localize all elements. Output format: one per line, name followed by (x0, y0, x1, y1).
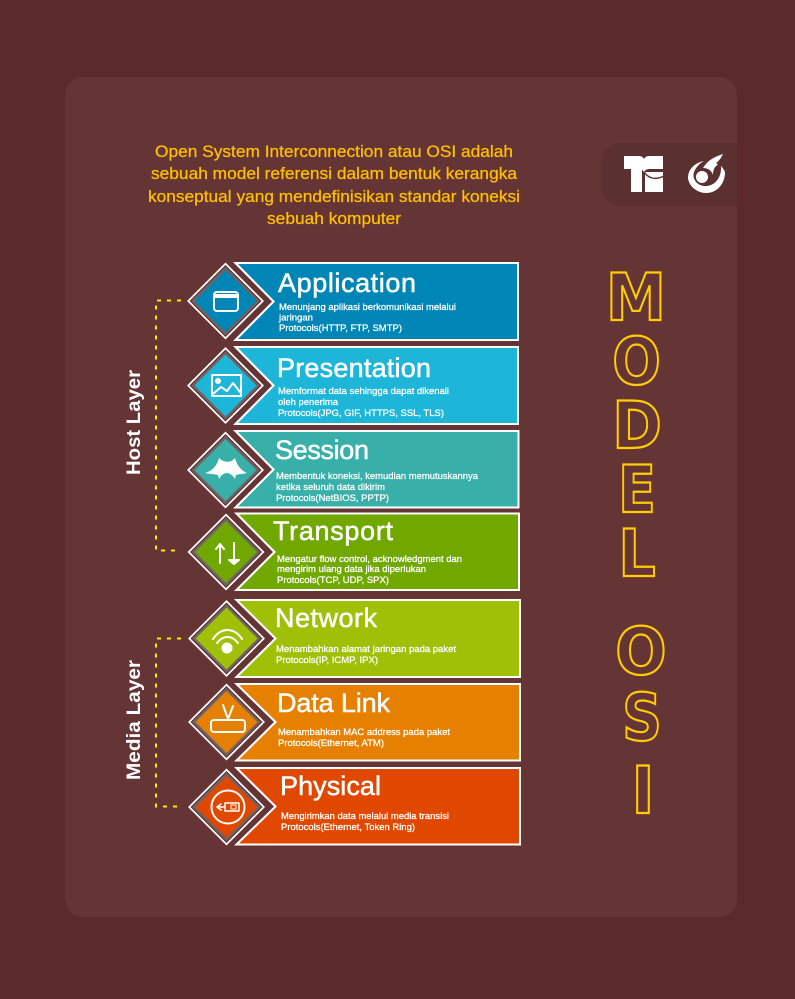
ribbon (234, 512, 520, 591)
diamond (188, 768, 265, 846)
icon: bat shape (205, 458, 247, 479)
layer: Application (187, 262, 519, 341)
description: mengirim ulang data jika diperlukan (277, 564, 426, 575)
panel: logo strip (601, 143, 737, 206)
heading: Application (278, 268, 416, 298)
heading: Transport (273, 516, 393, 546)
heading: MODEL OSI vertical: E (618, 453, 656, 528)
heading: Presentation (277, 353, 431, 383)
panel: main card (65, 77, 737, 917)
icon: book logo (624, 156, 664, 192)
icon: eye logo (688, 154, 725, 193)
layer: Session (187, 430, 520, 508)
icon: router (211, 705, 245, 732)
layer: Network (188, 599, 521, 678)
description: Mengirimkan data melalui media transisi (281, 811, 449, 822)
description (276, 471, 479, 504)
description (278, 386, 449, 419)
description: Menambahkan MAC address pada paket (278, 727, 450, 738)
description: jaringan (278, 312, 313, 324)
heading: MODEL OSI vertical: I (632, 753, 654, 828)
ribbon (234, 599, 521, 678)
description: Menunjang aplikasi berkomunikasi melalui (279, 302, 456, 313)
diamond (188, 684, 265, 760)
description: Protocols(IP, ICMP, IPX) (276, 655, 378, 666)
description (281, 811, 449, 833)
description (276, 644, 456, 666)
description: ketika seluruh data dikirim (276, 482, 385, 493)
layer: Transport (188, 512, 520, 591)
label: Media Layer: Media Layer (124, 659, 145, 780)
title: konseptual yang mendefinisikan standar koneksi (148, 187, 520, 206)
description: Protocols(TCP, UDP, SPX) (277, 575, 389, 586)
description (277, 554, 462, 586)
heading: Data Link (277, 688, 390, 718)
diamond (188, 600, 265, 677)
layer: Presentation (187, 346, 519, 425)
heading: MODEL OSI vertical: S (622, 681, 662, 756)
title: sebuah model referensi dalam bentuk kerangka (151, 164, 518, 183)
layer: Physical (188, 767, 521, 846)
description: Menambahkan alamat jaringan pada paket (276, 644, 456, 655)
description (278, 302, 456, 334)
description: Protocols(HTTP, FTP, SMTP) (279, 323, 402, 334)
title (148, 142, 520, 228)
heading: MODEL OSI vertical: L (618, 516, 656, 592)
title: Open System Interconnection atau OSI adalah (155, 142, 513, 161)
ribbon (234, 683, 521, 762)
ribbon (233, 262, 519, 341)
heading: MODEL OSI vertical: D (612, 388, 662, 464)
heading: Network (275, 603, 378, 633)
description: oleh penerima (278, 397, 339, 408)
icon: picture (212, 375, 241, 396)
description: Protocols(NetBIOS, PPTP) (276, 493, 389, 504)
label: Host Layer: Host Layer (124, 369, 145, 475)
diamond (188, 514, 264, 590)
ribbon (234, 767, 521, 846)
heading: MODEL OSI vertical: O (615, 614, 667, 690)
diamond (187, 347, 264, 424)
icon: window (214, 292, 238, 311)
heading: Session (275, 435, 369, 465)
icon: up and down arrows (216, 543, 239, 564)
ribbon (233, 430, 520, 508)
title: sebuah komputer (267, 209, 401, 228)
description: Memformat data sehingga dapat dikenali (278, 386, 449, 397)
bracket: media layer (156, 638, 181, 806)
heading: MODEL OSI vertical (606, 260, 667, 828)
heading: MODEL OSI vertical: M (606, 260, 666, 336)
description: Protocols(Ethernet, ATM) (278, 738, 384, 749)
ribbon (233, 346, 519, 425)
heading: MODEL OSI vertical: O (612, 325, 661, 400)
layer: Data Link (188, 683, 521, 762)
bracket: host layer (156, 300, 181, 550)
icon: wifi (213, 630, 242, 652)
description: Protocols(JPG, GIF, HTTPS, SSL, TLS) (278, 408, 444, 419)
description: Membentuk koneksi, kemudian memutuskannya (276, 471, 479, 482)
description (278, 727, 450, 749)
description: Mengatur flow control, acknowledgment dan (277, 554, 462, 565)
heading: Physical (280, 771, 381, 801)
description: Protocols(Ethernet, Token Ring) (281, 822, 415, 833)
diamond (187, 262, 264, 340)
diamond (187, 432, 264, 508)
icon: cable plug (212, 790, 244, 824)
